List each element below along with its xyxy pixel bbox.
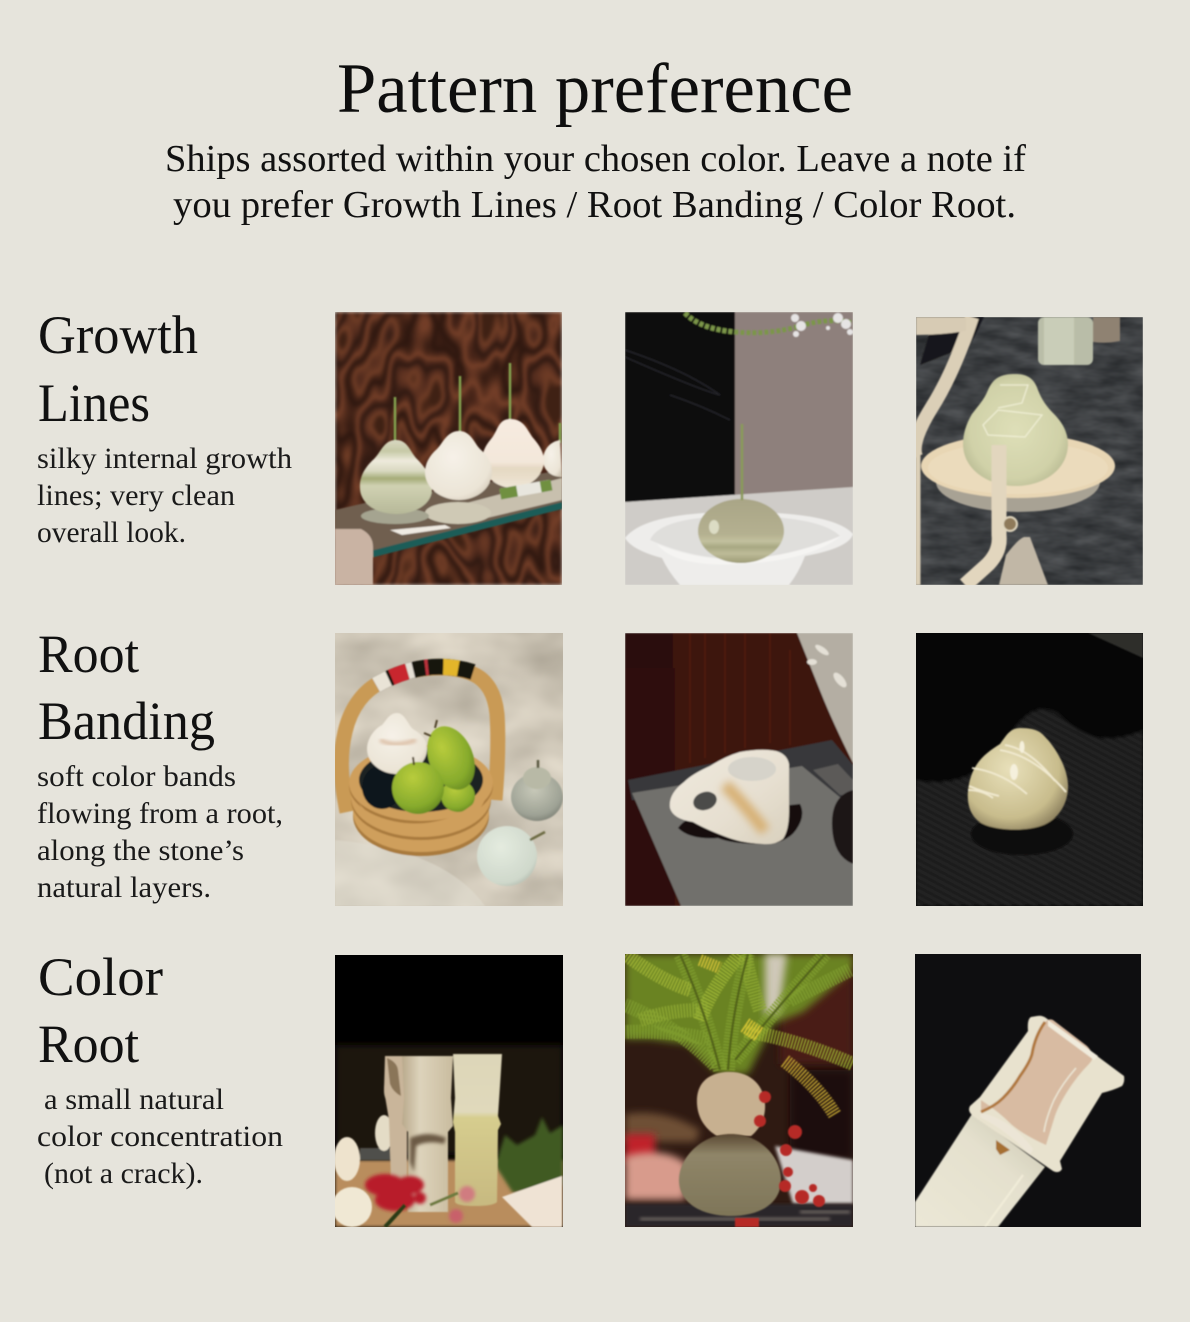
description: Growth Lines: [37, 442, 292, 549]
row label: Growth Lines: [37, 305, 292, 549]
heading: Color Root: Root: [38, 1014, 139, 1074]
description: Growth Lines: lines; very clean: [37, 479, 235, 512]
photo: pale green sphere on white plate: [625, 312, 853, 585]
heading: Growth Lines: [38, 305, 198, 433]
photo: white pears on glass shelf: [335, 312, 562, 585]
row label: Color Root: [37, 947, 283, 1190]
photo: two-tier vase with greenery: [625, 954, 853, 1227]
photo: rattan basket with pears: [335, 633, 563, 906]
heading: Growth Lines: Lines: [38, 373, 150, 433]
description: Growth Lines: silky internal growth: [37, 442, 292, 475]
description: Root Banding: along the stone’s: [37, 834, 244, 867]
subtitle: Ships assorted within your chosen color. Leave a note if: [165, 138, 1026, 180]
subtitle: you prefer Growth Lines / Root Banding / Color Root.: [173, 184, 1016, 226]
description: Color Root: (not a crack).: [44, 1157, 203, 1190]
heading: Color Root: [38, 947, 163, 1074]
heading: Root Banding: [38, 624, 215, 751]
description: Root Banding: natural layers.: [37, 871, 211, 904]
heading: Root Banding: Root: [38, 624, 139, 684]
photo: pale green pear on cream dish with branch: [915, 317, 1143, 585]
heading: Growth Lines: Growth: [38, 305, 198, 365]
description: Root Banding: flowing from a root,: [37, 797, 283, 830]
description: Color Root: [37, 1083, 283, 1190]
description: Root Banding: [37, 760, 283, 904]
photo: banded pear on black textile: [916, 633, 1143, 906]
photo: bamboo-form vases on table: [332, 955, 563, 1227]
description: Growth Lines: overall look.: [37, 516, 186, 549]
subtitle: [165, 138, 1026, 226]
heading: Root Banding: Banding: [38, 691, 215, 751]
title: Pattern preference: [337, 50, 853, 128]
description: Root Banding: soft color bands: [37, 760, 236, 793]
row label: Root Banding: [37, 624, 283, 904]
photo: white stone mug on grey plate: [625, 633, 853, 906]
heading: Color Root: Color: [38, 947, 163, 1007]
description: Color Root: color concentration: [37, 1120, 283, 1153]
photo: white bamboo-form vase on black: [915, 954, 1141, 1227]
description: Color Root: a small natural: [44, 1083, 224, 1116]
